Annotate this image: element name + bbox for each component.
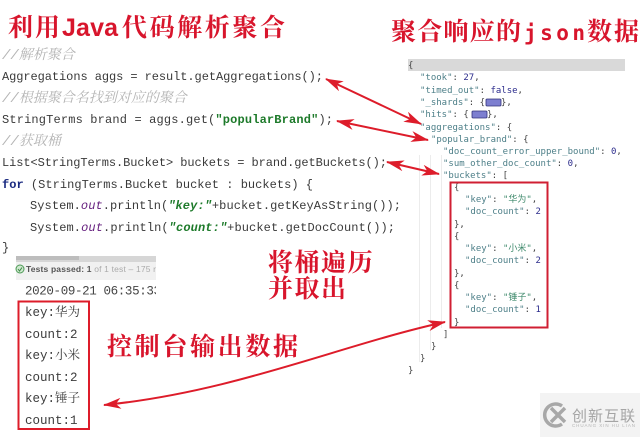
icon: collapsed hits	[472, 111, 487, 118]
annotation: iterate buckets and fetch	[268, 243, 374, 305]
json closing brackets: }	[420, 354, 425, 364]
watermark logo	[540, 393, 640, 437]
json text top: "_shards": {	[420, 98, 485, 108]
console output box	[18, 302, 89, 429]
json bucket list: },	[454, 220, 465, 230]
console lines: count:2	[25, 328, 78, 342]
watermark subtitle: CHUANG XIN HU LIAN	[572, 423, 635, 428]
arrow: aggregations line to json	[326, 79, 421, 124]
json text top: "took": 27,	[420, 73, 480, 83]
code line: aggregations: Aggregations aggs = result.getAggregations();	[2, 70, 323, 84]
json bucket list: },	[454, 269, 465, 279]
test bar	[16, 256, 156, 280]
title: aggregation response json data: 数据	[587, 12, 639, 48]
json text top: "popular_brand": {	[431, 135, 529, 145]
icon: logo mark	[545, 404, 565, 426]
arrow: json buckets to console output	[104, 322, 445, 405]
json bucket list: }	[454, 318, 459, 328]
json closing brackets: ]	[443, 330, 448, 340]
json bucket list: "doc_count": 2	[465, 256, 541, 266]
watermark name: 创新互联	[572, 405, 635, 426]
json closing brackets: }	[431, 342, 436, 352]
icon: test passed check	[16, 265, 24, 273]
json text top: "aggregations": {	[420, 123, 512, 133]
json bucket list	[454, 183, 541, 328]
json bucket list: "key": "小米",	[465, 242, 537, 254]
title: Java code parsing aggregation: 利用	[8, 8, 60, 44]
code line: print key: System.out.println("key:"+bucket.getKeyAsString());	[30, 199, 401, 213]
title: aggregation response json data: 聚合响应的	[391, 12, 521, 48]
console lines: key:锤子	[25, 391, 80, 406]
json text top: },	[487, 110, 498, 120]
json text top: "hits": {	[420, 110, 469, 120]
code line: print count: System.out.println("count:"+bucket.getDocCount());	[30, 221, 395, 235]
json text top: "buckets": [	[443, 171, 508, 181]
json bucket list: {	[454, 183, 459, 193]
panel: json response	[408, 59, 625, 376]
annotation: iterate buckets and fetch: 并取出	[268, 269, 348, 305]
json bucket highlight box	[450, 182, 548, 328]
panel: console output	[16, 256, 161, 429]
timestamp: 2020-09-21 06:35:33	[25, 284, 161, 298]
title: aggregation response json data	[391, 12, 639, 48]
json text top	[408, 61, 622, 181]
code comment 2: //根据聚合名找到对应的聚合	[2, 90, 189, 107]
json text top: "doc_count_error_upper_bound": 0,	[443, 147, 622, 157]
indent guides	[420, 155, 442, 362]
title: Java code parsing aggregation	[8, 8, 285, 44]
json closing brackets	[408, 330, 448, 376]
arrow: buckets line to json	[387, 162, 439, 174]
icon: collapsed shards	[486, 99, 501, 106]
json bucket list: {	[454, 281, 459, 291]
annotation: iterate buckets and fetch: 将桶遍历	[268, 243, 374, 279]
console lines: count:2	[25, 371, 78, 385]
code line: for loop: for (StringTerms.Bucket bucket : buckets) {	[2, 178, 313, 192]
json text top: "timed_out": false,	[420, 86, 523, 96]
code line: buckets: List<StringTerms.Bucket> buckets = brand.getBuckets();	[2, 156, 387, 170]
annotation: console output data: 控制台输出数据	[107, 327, 298, 363]
code line: closing brace: }	[2, 241, 9, 255]
arrow: brand line to json	[337, 121, 428, 140]
title: aggregation response json data: json	[524, 21, 585, 45]
panel: Java code	[2, 47, 401, 255]
console lines: count:1	[25, 414, 78, 428]
console lines: key:小米	[25, 347, 81, 363]
code comment 3: //获取桶	[2, 133, 63, 150]
console lines: key:华为	[25, 304, 80, 320]
test status text: Tests passed: 1 of 1 test – 175 r	[26, 264, 156, 274]
code comment 1: //解析聚合	[2, 47, 77, 64]
code line: brand: StringTerms brand = aggs.get("popularBrand");	[2, 113, 333, 127]
json bucket list: {	[454, 232, 459, 242]
console lines	[25, 304, 81, 428]
title: Java code parsing aggregation: Java	[62, 14, 119, 42]
json text top: "sum_other_doc_count": 0,	[443, 159, 578, 169]
json bucket list: "doc_count": 1	[465, 305, 541, 315]
json text top: },	[501, 98, 512, 108]
json bucket list: "doc_count": 2	[465, 207, 541, 217]
json text top: {	[408, 61, 413, 71]
json closing brackets: }	[408, 366, 413, 376]
json bucket list: "key": "华为",	[465, 193, 537, 205]
title: Java code parsing aggregation: 代码解析聚合	[122, 8, 285, 44]
json header bar	[408, 59, 625, 71]
json bucket list: "key": "锤子",	[465, 291, 537, 303]
